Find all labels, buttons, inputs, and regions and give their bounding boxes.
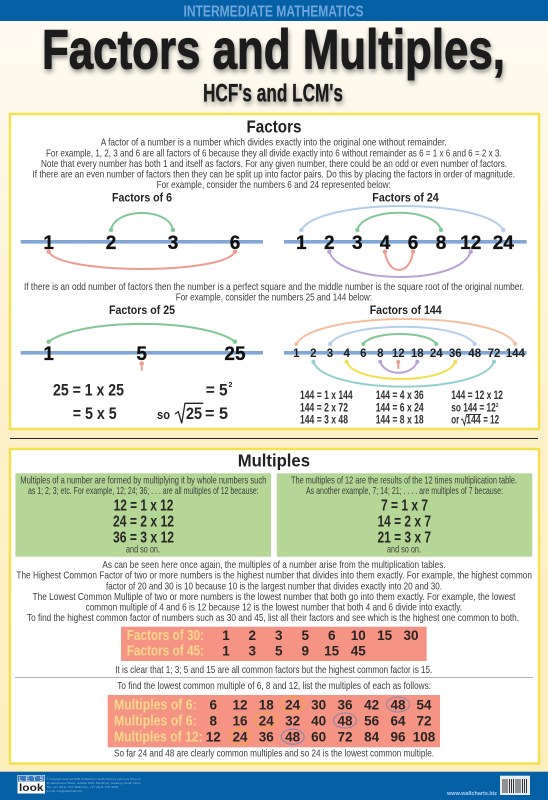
equations: 144: 144 = 12 x 12 bbox=[451, 390, 503, 402]
chart: factors of 144: 18 bbox=[411, 348, 424, 360]
table: common multiples: Multiples of 6: bbox=[114, 713, 197, 729]
table: common multiples: 64 bbox=[390, 713, 406, 728]
table: common factors: 5 bbox=[275, 644, 283, 659]
website: www.wallcharts.biz bbox=[446, 791, 497, 797]
table: common multiples: 6 bbox=[210, 697, 218, 712]
chart: factors of 144: 1 bbox=[293, 348, 300, 360]
table: common multiples: 16 bbox=[232, 713, 248, 728]
panel: multiples of 7: and so on. bbox=[387, 545, 421, 556]
table: common multiples: Multiples of 12: bbox=[114, 729, 203, 745]
equations: 144: = 12 bbox=[483, 414, 499, 426]
text block: hcf and lcm explanation: common multiple of 4 and 6 is 12 because 12 is the lowest number that both 4 and 6 divide into exactly. bbox=[86, 602, 462, 614]
subtitle: HCF's and LCM's bbox=[203, 80, 343, 108]
equations: 25: 25 bbox=[186, 404, 202, 423]
heading: factors: Factors bbox=[246, 117, 302, 137]
table: common multiples: 84 bbox=[364, 729, 380, 744]
panel: multiples of 7: 21 = 3 x 7 bbox=[378, 530, 431, 546]
panel: multiples of 7: 14 = 2 x 7 bbox=[378, 514, 431, 531]
equations: 144: 144 = 4 x 36 bbox=[376, 390, 424, 402]
panel: factors bbox=[10, 114, 539, 429]
chart: factors of 24: 3 bbox=[352, 233, 363, 254]
chart: factors of 6: 1 bbox=[43, 233, 54, 254]
text block: odd number of factors bbox=[24, 282, 524, 303]
equations: 25: = 5 bbox=[206, 381, 228, 400]
table: common factors: 45 bbox=[351, 644, 366, 659]
chart: factors of 24 bbox=[284, 193, 527, 277]
table: common multiples: 30 bbox=[311, 697, 326, 712]
table: common multiples: 18 bbox=[259, 697, 274, 712]
chart: factors of 144: 48 bbox=[468, 348, 482, 360]
chart: factors of 24: 12 bbox=[460, 233, 481, 254]
table: common factors: 9 bbox=[302, 644, 309, 659]
logo: look bbox=[19, 783, 44, 794]
copyright text bbox=[46, 777, 141, 793]
chart: factors of 25: 25 bbox=[224, 344, 246, 365]
table: common multiples: 32 bbox=[285, 713, 300, 728]
text: lowest common multiple intro: To find the lowest common multiple of 6, 8 and 12, list the multiples of each as follows: bbox=[117, 681, 431, 692]
chart: factors of 24: 2 bbox=[324, 233, 335, 254]
table: common multiples: 12 bbox=[232, 697, 248, 712]
panel: multiples of 7: 7 = 1 x 7 bbox=[381, 498, 428, 515]
equations: 144: 144 = 3 x 48 bbox=[300, 414, 348, 426]
panel: multiples of 12: Multiples of a number are formed by multiplying it by whole numbers such bbox=[20, 475, 266, 486]
table: common factors: 30 bbox=[403, 628, 419, 643]
table: common factors bbox=[121, 627, 427, 661]
table: common factors: 2 bbox=[249, 628, 256, 643]
table: common multiples: 56 bbox=[364, 713, 380, 728]
table: common factors: Factors of 45: bbox=[127, 644, 204, 660]
text block: hcf and lcm explanation: As can be seen here once again, the multiples of a number arise from the multiplication tables. bbox=[102, 560, 446, 571]
chart: factors of 6: 3 bbox=[168, 233, 178, 254]
chart: factors of 6: 6 bbox=[230, 233, 240, 254]
chart: factors of 144: 6 bbox=[360, 348, 367, 360]
table: common multiples: 42 bbox=[364, 697, 379, 712]
equations: 144: or bbox=[451, 414, 460, 426]
table: common multiples: 48 bbox=[285, 729, 301, 744]
equations: 144: 144 = 8 x 18 bbox=[376, 414, 424, 426]
text: common factor conclusion: It is clear that 1; 3; 5 and 15 are all common factors but the highest common factor is 15. bbox=[115, 665, 432, 676]
copyright text: 30 Hartzenbos Street, Jukskei Park, Randburg, Gauteng, South Africa bbox=[46, 781, 141, 785]
chart: factors of 25 bbox=[21, 305, 263, 370]
table: common factors: 10 bbox=[351, 628, 366, 643]
chart: factors of 24: 1 bbox=[296, 233, 307, 254]
table: common factors: Factors of 30: bbox=[127, 628, 204, 644]
copyright text: © Copyright reserved 2009. Published in South Africa by Lets Look (Pty) Ltd bbox=[46, 777, 141, 781]
top banner: INTERMEDIATE MATHEMATICS bbox=[184, 4, 364, 21]
chart: factors of 144: 2 bbox=[310, 348, 317, 360]
table: common multiples: 40 bbox=[311, 713, 326, 728]
text block: hcf and lcm explanation: factor of 20 and 30 is 10 because 10 is the largest number that divides exactly into 20 and 30. bbox=[106, 581, 442, 592]
copyright text: E-mail: info@wallcharts.biz bbox=[46, 789, 83, 793]
panel: multiples of 7 bbox=[277, 473, 532, 557]
heading: multiples: Multiples bbox=[238, 451, 310, 471]
logo bbox=[18, 775, 45, 794]
table: common multiples: 48 bbox=[337, 713, 353, 728]
equations: 25: 25 = 1 x 25 bbox=[53, 381, 124, 400]
panel: multiples of 12 bbox=[15, 473, 271, 557]
table: common factors: 3 bbox=[275, 628, 283, 643]
chart: factors of 24: 8 bbox=[436, 233, 446, 254]
panel: multiples bbox=[10, 449, 539, 764]
table: common factors: 15 bbox=[324, 644, 340, 659]
equations: 25: 2 bbox=[228, 382, 232, 389]
table: common multiples: 12 bbox=[206, 729, 221, 744]
table: common multiples: 54 bbox=[416, 697, 432, 712]
text block: odd number of factors: For example, consider the numbers 25 and 144 below: bbox=[176, 292, 372, 303]
chart: factors of 25: 5 bbox=[136, 344, 147, 365]
table: common factors: 5 bbox=[302, 628, 310, 643]
table: common factors: 15 bbox=[377, 628, 393, 643]
chart: factors of 6: Factors of 6 bbox=[112, 193, 172, 205]
equations: 144: 144 = 1 x 144 bbox=[300, 390, 353, 402]
chart: factors of 144: 12 bbox=[392, 348, 405, 360]
table: common multiples: 48 bbox=[390, 697, 406, 712]
chart: factors of 144: Factors of 144 bbox=[370, 305, 442, 317]
equations: 25 bbox=[53, 381, 232, 423]
logo: LETS bbox=[19, 777, 44, 783]
chart: factors of 24: 6 bbox=[408, 233, 418, 254]
equations: 144 bbox=[300, 390, 503, 426]
chart: factors of 6: 2 bbox=[106, 233, 116, 254]
text block: factors introduction: A factor of a number is a number which divides exactly into the original one without remainder. bbox=[101, 138, 447, 149]
table: common multiples: 108 bbox=[413, 729, 436, 744]
panel: multiples of 12: 12 = 1 x 12 bbox=[114, 498, 173, 515]
footer bbox=[0, 772, 548, 800]
table: common factors: 3 bbox=[249, 644, 257, 659]
panel: multiples of 12: 36 = 3 x 12 bbox=[113, 530, 174, 546]
panel: multiples of 12: and so on. bbox=[126, 545, 160, 556]
chart: factors of 144: 144 bbox=[506, 348, 525, 360]
chart: factors of 25: 1 bbox=[43, 344, 54, 365]
table: common multiples: 72 bbox=[416, 713, 432, 728]
copyright text: Tel: +27 (0)11 704 3000 Fax: +27 (0)11 704 3001 bbox=[46, 785, 119, 789]
chart: factors of 24: 24 bbox=[493, 233, 514, 254]
table: common multiples: 36 bbox=[337, 697, 353, 712]
table: common multiples: 72 bbox=[337, 729, 353, 744]
text block: factors introduction bbox=[32, 138, 515, 191]
chart: factors of 144: 4 bbox=[343, 348, 350, 360]
panel: multiples of 12: as 1; 2; 3; etc. For example, 12; 24; 36; . . . are all multiples of 12 because: bbox=[28, 486, 259, 497]
equations: 144: 144 = 6 x 24 bbox=[376, 403, 424, 415]
table: common multiples: 24 bbox=[232, 729, 248, 744]
equations: 144: so 144 = 12 bbox=[451, 403, 496, 415]
table: common multiples: 24 bbox=[259, 713, 274, 728]
chart: factors of 144: 3 bbox=[327, 348, 333, 360]
equations: 144: 2 bbox=[496, 403, 499, 409]
equations: 144: 144 bbox=[466, 414, 481, 426]
equations: 144: 144 = 2 x 72 bbox=[300, 403, 348, 415]
chart: factors of 24: 4 bbox=[380, 233, 391, 254]
chart: factors of 144: 72 bbox=[488, 348, 500, 360]
chart: factors of 144 bbox=[284, 305, 527, 387]
chart: factors of 25: Factors of 25 bbox=[109, 305, 176, 317]
panel: multiples of 12: 24 = 2 x 12 bbox=[113, 514, 174, 531]
table: common multiples: 24 bbox=[285, 697, 301, 712]
text block: hcf and lcm explanation bbox=[16, 560, 532, 624]
table: common multiples: Multiples of 6: bbox=[114, 697, 197, 713]
chart: factors of 144: 36 bbox=[449, 348, 462, 360]
table: common multiples: 36 bbox=[259, 729, 274, 744]
table: common factors: 6 bbox=[328, 628, 336, 643]
table: common factors: 1 bbox=[222, 644, 230, 659]
top banner bbox=[0, 0, 548, 21]
equations: 25: = 5 bbox=[205, 404, 228, 423]
table: common multiples: 96 bbox=[390, 729, 406, 744]
chart: factors of 6 bbox=[21, 193, 263, 269]
table: common multiples bbox=[108, 695, 440, 747]
table: common multiples: 60 bbox=[311, 729, 326, 744]
table: common factors: 1 bbox=[222, 628, 230, 643]
text: lowest common multiple conclusion: So far 24 and 48 are clearly common multiples and so 24 is the lowest common multiple. bbox=[114, 749, 434, 760]
barcode bbox=[500, 776, 530, 795]
equations: 25: so bbox=[157, 407, 170, 422]
text block: factors introduction: For example, consider the numbers 6 and 24 represented below: bbox=[157, 180, 391, 191]
equations: 25: = 5 x 5 bbox=[73, 404, 117, 423]
chart: factors of 144: 8 bbox=[377, 348, 384, 360]
table: common multiples: 8 bbox=[210, 713, 218, 728]
chart: factors of 24: Factors of 24 bbox=[372, 193, 439, 205]
chart: factors of 144: 24 bbox=[430, 348, 443, 360]
